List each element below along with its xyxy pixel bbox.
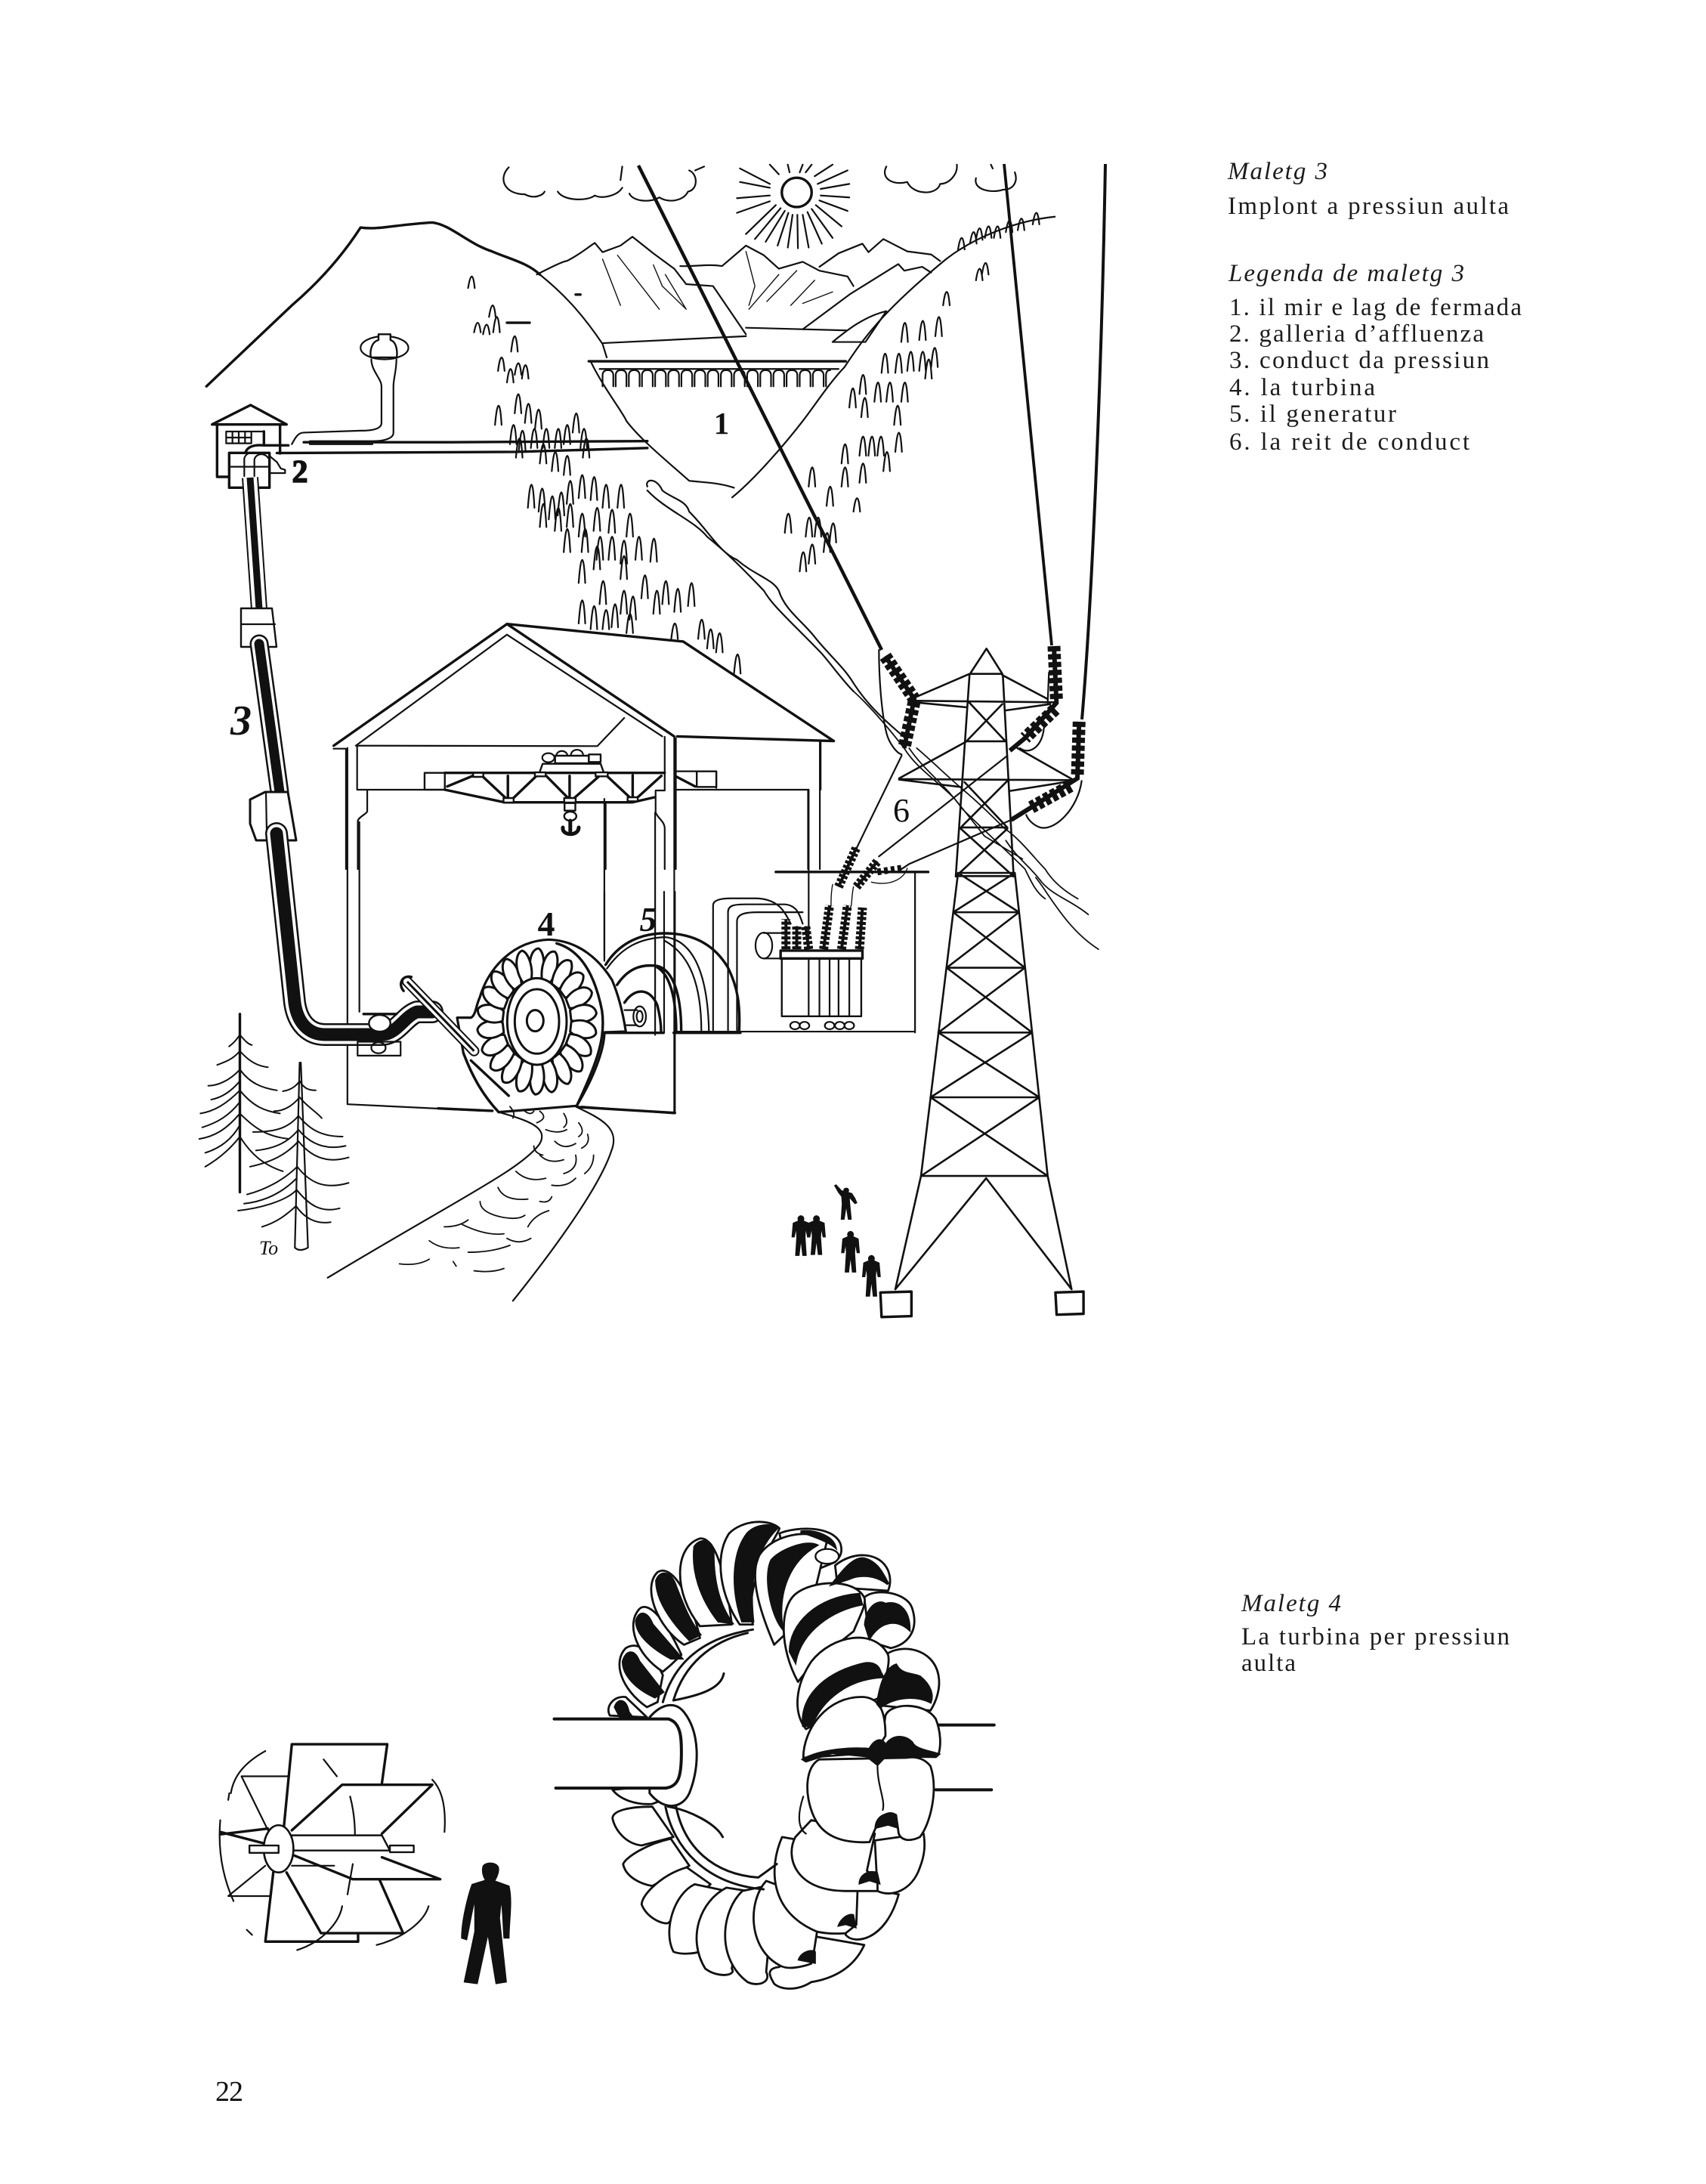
signature: To [259, 1237, 278, 1259]
illustration: high pressure plant: 5 [639, 900, 657, 939]
legend list: 4. la turbina [1229, 374, 1375, 401]
cables and transformer [677, 847, 928, 1032]
illustration: large Pelton wheel [555, 1522, 994, 1988]
valve house [212, 405, 289, 487]
caption: Implont a pressiun aulta: Implont a pressiun aulta [1228, 193, 1509, 220]
sky: clouds and sun [503, 165, 1016, 249]
mountains, dam and lake [206, 217, 1055, 738]
caption: La turbina per pressiun aulta: aulta [1241, 1650, 1296, 1677]
lower plain buckets [613, 1786, 864, 1988]
right buckets [753, 1757, 934, 1968]
surge tank and tunnel [277, 334, 647, 453]
number 6: 6 [893, 792, 910, 829]
turbine 4 in plant [457, 939, 626, 1112]
penstock pipe [241, 478, 432, 1035]
numbers 4 and 5: 4 [538, 905, 555, 943]
pine trees [199, 1014, 348, 1250]
caption: La turbina per pressiun aulta: La turbina per pressiun [1241, 1623, 1510, 1650]
tailwater river [328, 1106, 613, 1301]
hub, flange and shaft [663, 1629, 777, 1889]
number 1: 1 [714, 406, 729, 441]
legend list: 5. il generatur [1229, 401, 1396, 428]
legend list: 6. la reit de conduct [1229, 428, 1470, 456]
legend list: 1. il mir e lag de fermada [1229, 294, 1522, 321]
illustration: high pressure plant [199, 164, 1105, 1317]
caption block: Maletg 4 [1241, 1590, 1510, 1677]
nozzle and valve [357, 976, 474, 1056]
legend list: 2. galleria d’affluenza [1229, 320, 1484, 348]
upper buckets with dark cups [608, 1522, 940, 1758]
silhouette of a man [462, 1863, 511, 1984]
people near the tower [792, 1185, 880, 1296]
legend heading: Legenda de maletg 3 [1228, 260, 1464, 287]
legend list: 3. conduct da pressiun [1229, 347, 1489, 374]
forest [468, 213, 1040, 673]
powerhouse building [333, 624, 836, 1115]
number 2: 2 [292, 455, 308, 490]
legend list [1229, 294, 1522, 456]
power lines and insulators [638, 164, 1105, 820]
caption: La turbina per pressiun aulta [1241, 1623, 1510, 1677]
page number: 22 [215, 2076, 243, 2108]
caption: Maletg 4 title: Maletg 4 [1241, 1590, 1341, 1617]
transmission tower top [854, 648, 1082, 899]
caption: Maletg 3 title: Maletg 3 [1227, 158, 1327, 185]
transmission tower lower [880, 840, 1099, 1317]
caption block: Maletg 3 [1227, 158, 1522, 456]
generator [438, 892, 740, 1113]
illustration: small propeller turbine [220, 1744, 445, 1950]
number 3: 3 [230, 698, 252, 744]
